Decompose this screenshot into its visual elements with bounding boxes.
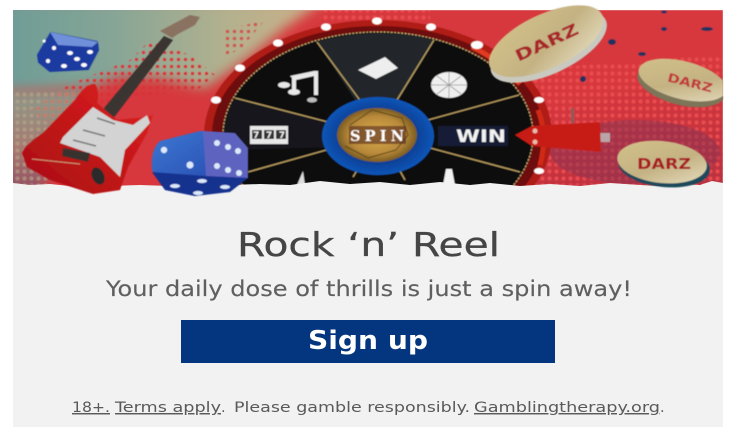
guitar body	[22, 84, 153, 194]
footer disclaimer: Please gamble responsibly.	[234, 400, 470, 416]
icon: slot machine 777: 777	[253, 131, 285, 141]
footer disclaimer: 18+.	[72, 400, 110, 416]
coin: right: DARZ	[666, 71, 714, 95]
win label: WIN	[456, 127, 506, 147]
icon: bottom symbols	[297, 169, 455, 185]
footer disclaimer: .	[221, 400, 226, 416]
coin: top	[478, 0, 617, 98]
subheading: Your daily dose of thrills is just a spin away!	[105, 277, 632, 302]
guitar headstock	[160, 15, 200, 38]
hero banner	[13, 10, 723, 186]
heading: Rock ‘n’ Reel	[237, 225, 500, 264]
guitar pickguard	[60, 107, 150, 177]
win label	[438, 126, 508, 147]
icon: slot machine 777	[250, 126, 288, 144]
footer disclaimer	[72, 400, 665, 416]
footer disclaimer: Terms apply	[114, 400, 222, 416]
button: sign up: Sign up	[308, 326, 428, 356]
icon: small blue die	[38, 32, 98, 71]
coin: top: DARZ	[512, 20, 582, 66]
icon: music notes	[278, 71, 318, 102]
coin: bottom: DARZ	[637, 155, 691, 173]
record highlight	[318, 33, 432, 100]
wheel red rim	[204, 20, 552, 186]
icon: roulette	[431, 72, 467, 98]
rim lights	[211, 18, 544, 174]
spin label: SPIN	[350, 128, 404, 145]
icon: large blue die	[152, 131, 248, 196]
coin: bottom	[615, 136, 712, 192]
icon: playing cards	[358, 57, 398, 79]
wheel	[204, 16, 611, 186]
footer disclaimer: Gamblingtherapy.org	[474, 400, 660, 416]
guitar	[22, 15, 200, 194]
wheel spokes	[235, 40, 520, 180]
button: sign up	[181, 320, 555, 363]
footer disclaimer: .	[660, 400, 665, 416]
coin: right	[636, 58, 724, 108]
guitar neck	[100, 36, 173, 120]
banner background	[13, 10, 723, 186]
wheel pointer	[515, 108, 610, 152]
wheel hub	[322, 97, 434, 175]
